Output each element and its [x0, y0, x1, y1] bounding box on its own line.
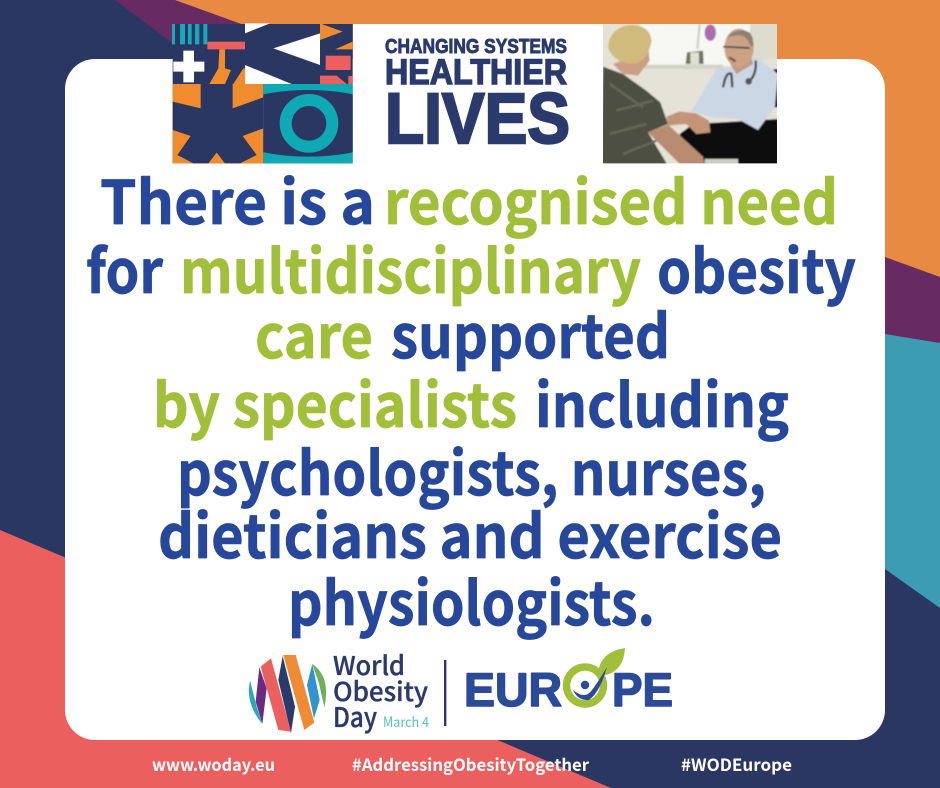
orchid — [686, 51, 704, 64]
headline: multidisciplinary — [180, 224, 641, 311]
photo: doctor holding patient's hands — [600, 21, 781, 167]
icon: striped globe — [249, 655, 326, 733]
patient — [601, 67, 668, 166]
logo: World Obesity Day: Obesity — [333, 672, 428, 709]
white triangles — [245, 23, 320, 84]
teal stripes — [172, 24, 207, 44]
headline: for — [86, 224, 164, 311]
headline: There is a — [100, 155, 375, 242]
small orange and red shapes — [320, 23, 353, 84]
footer links: #AddressingObesityTogether — [352, 751, 590, 776]
headline: recognised need — [384, 155, 838, 242]
red bar — [207, 42, 245, 49]
divider — [444, 660, 446, 726]
footer links: #WODEurope — [681, 751, 792, 776]
logo: World Obesity Day: Day — [333, 696, 377, 735]
campaign title — [385, 36, 570, 159]
footer links — [152, 751, 792, 776]
orange block with navy asterisk — [173, 68, 263, 163]
orange figure — [209, 49, 231, 84]
footer links: www.woday.eu — [152, 751, 275, 776]
doctor — [774, 69, 778, 107]
logo: World Obesity Day: March 4 — [383, 712, 429, 732]
logo wordmark: World — [333, 646, 405, 683]
headline: physiologists. — [288, 556, 655, 643]
headline: including — [535, 358, 789, 445]
headline: by specialists — [153, 358, 517, 445]
panel: white card — [65, 59, 885, 740]
headline: supported — [391, 289, 670, 376]
headline — [86, 155, 856, 643]
icon: green ring with leaf and figure — [566, 648, 625, 704]
icon: geometric campaign artwork — [172, 23, 353, 164]
white plus — [173, 51, 204, 82]
campaign title: LIVES — [385, 80, 570, 159]
logo: World Obesity Day — [249, 646, 429, 735]
logo: Europe: EUR — [464, 663, 562, 716]
campaign title: CHANGING SYSTEMS — [385, 36, 567, 58]
logo: Europe — [464, 648, 673, 716]
campaign title: HEALTHIER — [385, 53, 567, 92]
teal block with navy eye and ring — [263, 84, 353, 164]
headline: obesity — [657, 224, 856, 311]
white header strip behind campaign title — [353, 24, 777, 64]
headline: psychologists, nurses, — [177, 426, 766, 513]
logo: Europe: PE — [612, 663, 673, 716]
headline: care — [255, 289, 373, 376]
headline: dieticians and exercise — [158, 489, 782, 576]
